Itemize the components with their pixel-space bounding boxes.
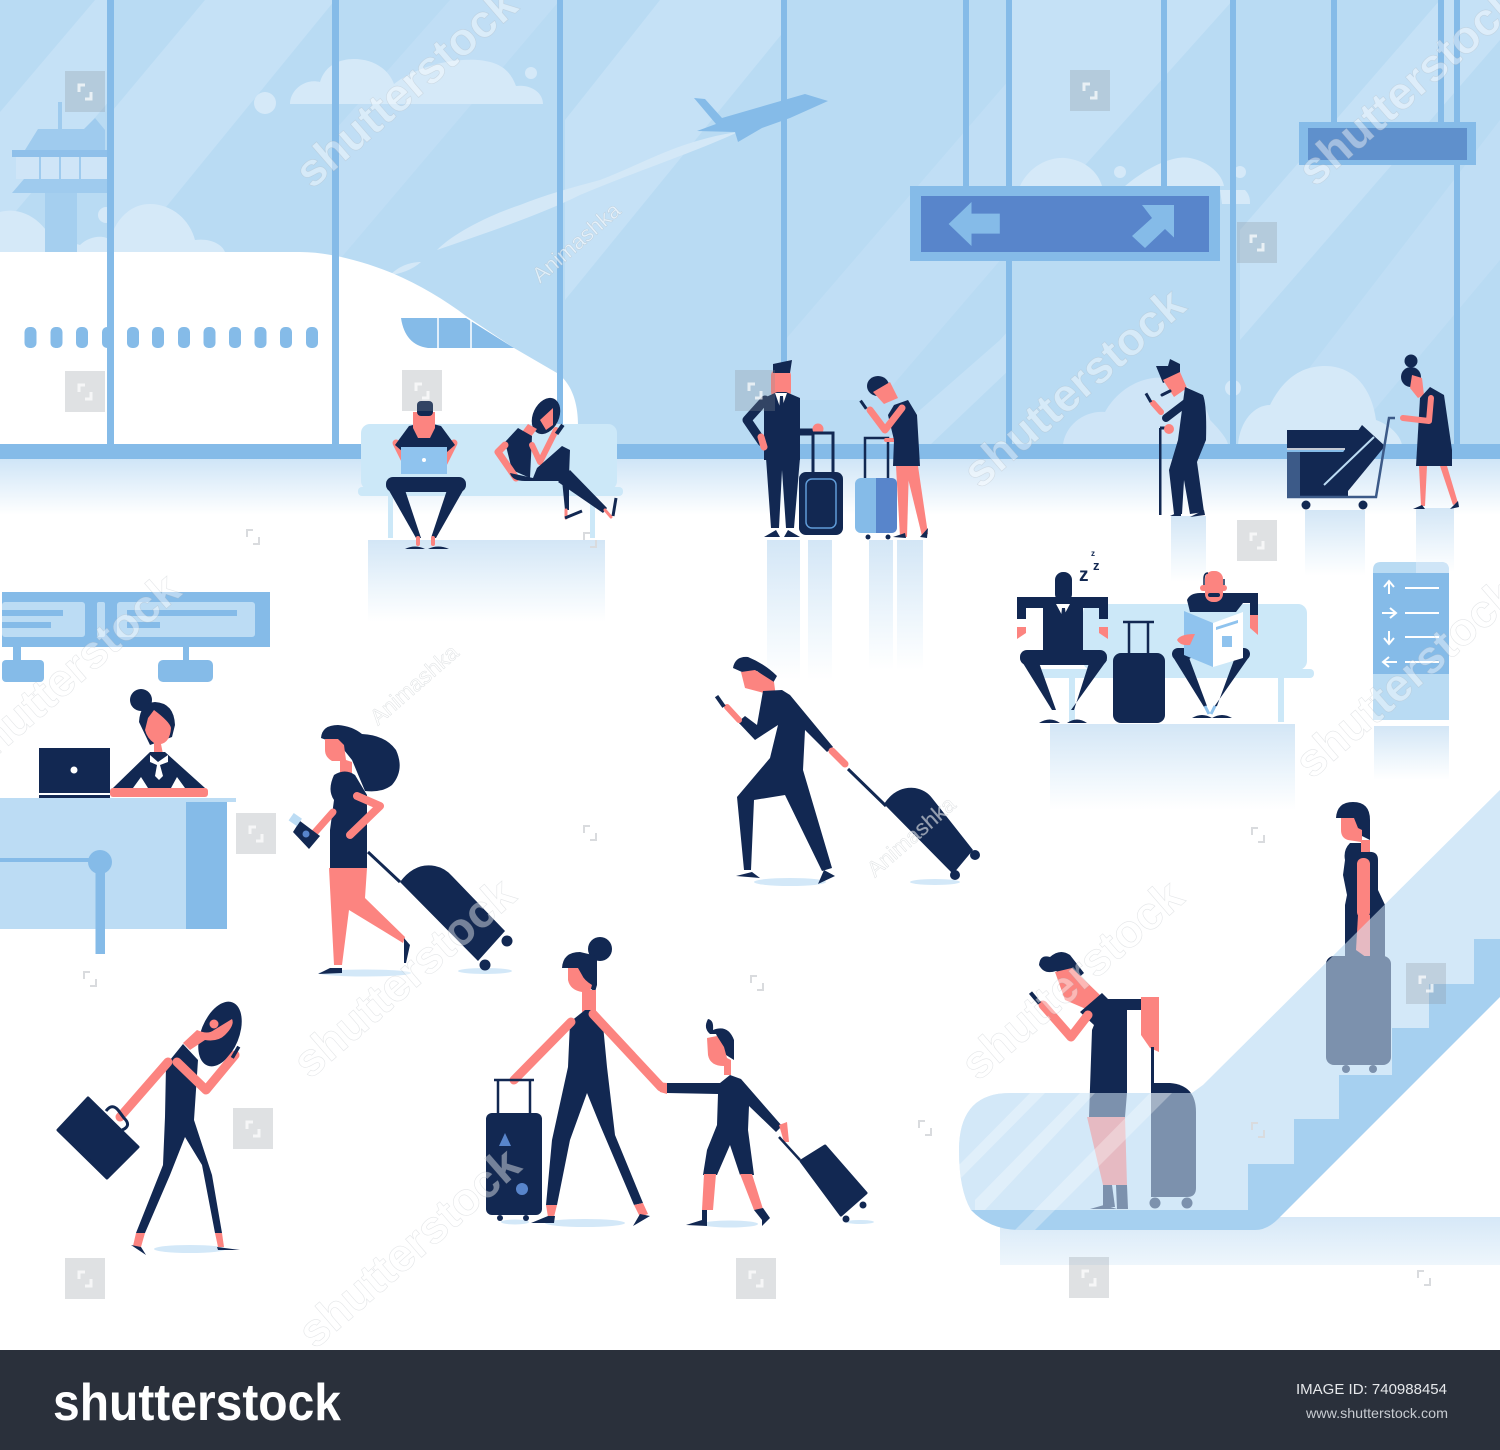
shutterstock watermarks: shutterstock (282, 867, 525, 1088)
rolling suitcase (884, 788, 973, 874)
watermark squares (65, 70, 1446, 1299)
shutterstock watermarks: shutterstock (950, 869, 1193, 1090)
pulled suitcase (400, 865, 505, 961)
receptionist (110, 689, 208, 797)
navy suitcase (799, 433, 843, 535)
distant airplane and contrail (390, 94, 828, 275)
sleep z letters: z (1093, 558, 1100, 573)
old man with hat and cane (1145, 359, 1206, 517)
sleep z letters (1079, 549, 1100, 586)
hanging direction sign with arrows (910, 186, 1220, 261)
parked airliner (0, 252, 578, 446)
image id: IMAGE ID: 740988454 (1296, 1381, 1447, 1398)
mother with suitcase holding child hand (486, 937, 661, 1227)
control tower (12, 102, 108, 252)
clouds (0, 59, 1402, 445)
bench with laptop man and phone woman (358, 393, 623, 549)
escalator (959, 790, 1500, 1265)
sleep z letters: z (1091, 549, 1095, 558)
small suitcase (801, 1146, 866, 1215)
sleep z letters: z (1079, 565, 1088, 586)
information kiosk with direction arrows (1373, 562, 1449, 720)
child pulling small suitcase (656, 1019, 874, 1228)
man with laptop (386, 401, 466, 549)
woman with briefcase looking at phone (58, 995, 250, 1255)
website: www.shutterstock.com (1305, 1405, 1448, 1421)
floor edge and floor glow (0, 444, 1500, 515)
floor reflections (368, 508, 1454, 810)
luggage cart (1287, 418, 1395, 510)
footer bar (0, 1350, 1500, 1450)
black suitcase with stickers (486, 1080, 542, 1221)
window mullions (107, 0, 1460, 446)
woman with long hair pulling suitcase (289, 725, 512, 976)
small grey watermark marks (84, 530, 1430, 1285)
woman pushing luggage cart (1287, 354, 1459, 510)
seated travellers on bench (1017, 549, 1314, 723)
shutterstock watermarks: Animashka (862, 791, 961, 882)
small hanging sign (1299, 122, 1476, 165)
upright suitcase (1150, 1047, 1196, 1208)
footer logo: shutterstock (53, 1374, 341, 1432)
man on escalator with phone (1029, 952, 1196, 1209)
businessman with suitcase (747, 360, 843, 537)
woman with phone on bench (498, 393, 616, 518)
shutterstock watermarks: shutterstock (287, 1137, 530, 1358)
translucent escalator glass (959, 790, 1500, 1230)
check-in desk with receptionist (0, 689, 236, 954)
suitcase between seats (1113, 622, 1165, 723)
shutterstock watermarks: shutterstock (952, 277, 1195, 498)
laptop on desk (39, 748, 110, 799)
woman on escalator with suitcase (1326, 802, 1391, 1073)
window wall with sky (0, 0, 1500, 446)
woman with blue suitcase looking at phone (855, 376, 928, 540)
departure board (2, 592, 270, 682)
briefcase (58, 1098, 138, 1178)
shutterstock watermarks: Animashka (527, 197, 626, 288)
sleeping man (1017, 549, 1108, 723)
watermark square glyph marks (79, 84, 1432, 1286)
rushing man with phone and suitcase (715, 657, 980, 886)
shutterstock watermarks: Animashka (365, 639, 464, 730)
man reading newspaper (1172, 571, 1258, 718)
